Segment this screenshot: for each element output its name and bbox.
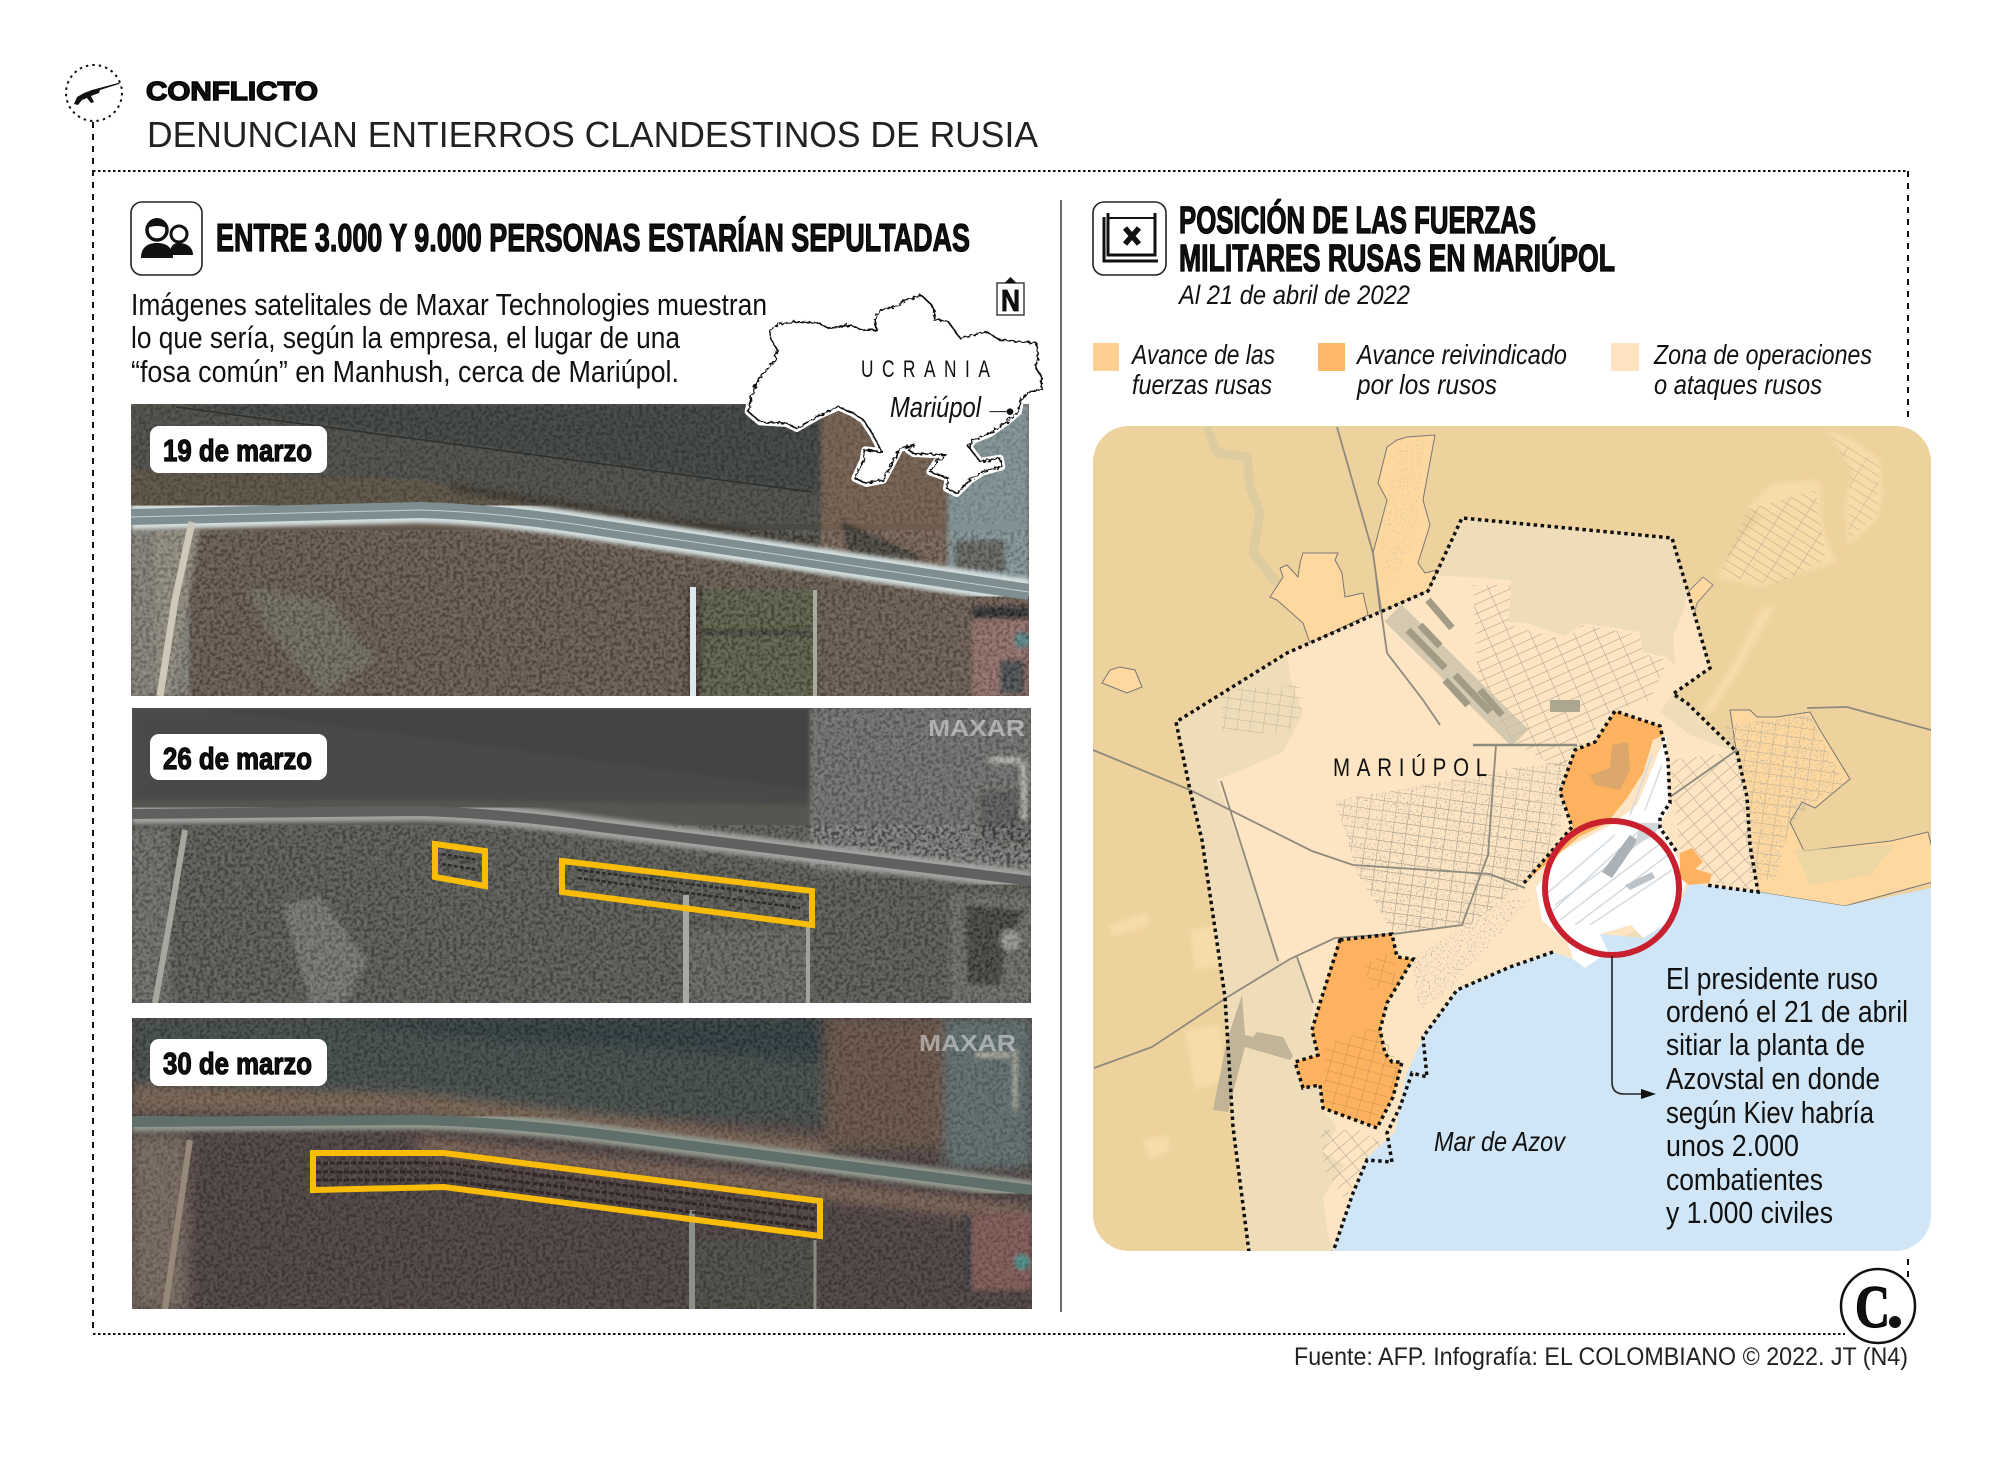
red circle: Azovstal [1545,821,1679,955]
callout: Azovstal siege: y 1.000 civiles [1666,1195,1833,1230]
callout: Azovstal siege: ordenó el 21 de abril [1666,994,1908,1029]
logo: El Colombiano [1841,1269,1915,1343]
callout: Azovstal siege [1666,961,1908,1230]
callout: Azovstal siege: sitiar la planta de [1666,1027,1865,1062]
source credit: Fuente: AFP. Infografía: EL COLOMBIANO © 2022. JT (N4) [1294,1343,1908,1371]
date label: 30 de marzo: 30 de marzo [163,1046,312,1081]
legend: Avance de las [1130,339,1275,370]
icon: map with x [1093,202,1166,275]
legend: Zona de operaciones [1653,339,1872,370]
highlight box [313,1153,820,1236]
satellite image: 26 de marzo [132,708,1031,1003]
panel: left satellite images [131,202,1042,1309]
satellite image: 30 de marzo [132,1018,1032,1309]
legend: o ataques rusos [1654,369,1822,400]
kicker: CONFLICTO: CONFLICTO [146,76,318,106]
logo: El Colombiano: C [1855,1274,1890,1340]
Russian claimed advance NE [1524,711,1712,885]
locator map: Ukraine [748,296,1042,493]
date label: 26 de marzo [150,734,327,780]
city area [1217,575,1758,1252]
callout: Azovstal siege: El presidente ruso [1666,961,1878,996]
steel plant north [1393,600,1580,738]
settlements outside the zone [1102,435,1940,906]
subheading: date: Al 21 de abril de 2022 [1177,280,1410,310]
date label: 19 de marzo: 19 de marzo [163,433,312,468]
callout: Azovstal siege: según Kiev habría [1666,1095,1875,1130]
airport [1213,995,1293,1112]
arrow: to callout [1612,956,1656,1099]
panel: right map section [1093,198,1940,1260]
outer dotted frame [93,122,1908,1334]
text block: intro: lo que sería, según la empresa, el lugar de una [131,320,681,355]
date label: 26 de marzo: 26 de marzo [163,741,312,776]
dotted boundaries [1176,518,1758,1252]
satellite image: 19 de marzo [131,404,1030,696]
callout: Azovstal siege: combatientes [1666,1162,1823,1197]
callout: Azovstal siege: Azovstal en donde [1666,1061,1880,1096]
locator map: Ukraine: UCRANIA [861,356,990,383]
icon: rifle in dotted circle [66,65,122,121]
Russian claimed advance SW [1295,934,1413,1128]
label: Mar de Azov: Mar de Azov [1434,1126,1567,1157]
Azovstal plant [1536,735,1686,968]
river [1207,427,1277,583]
operations zone [1176,518,1758,1260]
sea [1333,883,1931,1252]
watermark: MAXAR [928,715,1025,741]
heading: right panel [1179,198,1615,280]
date label: 19 de marzo [150,426,327,473]
roads [1093,427,1931,1068]
street grids [1222,435,1880,1200]
burial rows [316,1163,815,1228]
legend [1093,339,1872,400]
icon: people [131,202,202,275]
heading: right panel: POSICIÓN DE LAS FUERZAS [1179,198,1536,242]
icon: north arrow: N [1001,283,1020,318]
burial rows [442,854,800,908]
callout: Azovstal siege: unos 2.000 [1666,1128,1799,1163]
heading: left panel: ENTRE 3.000 Y 9.000 PERSONAS ESTARÍAN SEPULTADAS [216,216,970,260]
highlight boxes [435,844,812,925]
watermark: MAXAR [919,1030,1016,1056]
heading: right panel: MILITARES RUSAS EN MARIÚPOL [1179,236,1615,280]
peninsula detail [1795,845,1895,885]
locator map: Ukraine: Mariúpol [890,392,982,424]
text block: intro [131,287,767,389]
legend: Avance reivindicado [1355,339,1567,370]
label: Mariupol: MARIÚPOL [1333,753,1487,781]
legend: por los rusos [1356,369,1497,400]
legend: fuerzas rusas [1132,369,1272,400]
date label: 30 de marzo [150,1039,327,1086]
map: Mariupol [1093,426,1940,1260]
title: DENUNCIAN ENTIERROS CLANDESTINOS DE RUSIA [147,114,1039,155]
text block: intro: “fosa común” en Manhush, cerca de Mariúpol. [131,354,679,389]
text block: intro: Imágenes satelitales de Maxar Technologies muestran [131,287,767,322]
panel divider [1060,200,1062,1312]
